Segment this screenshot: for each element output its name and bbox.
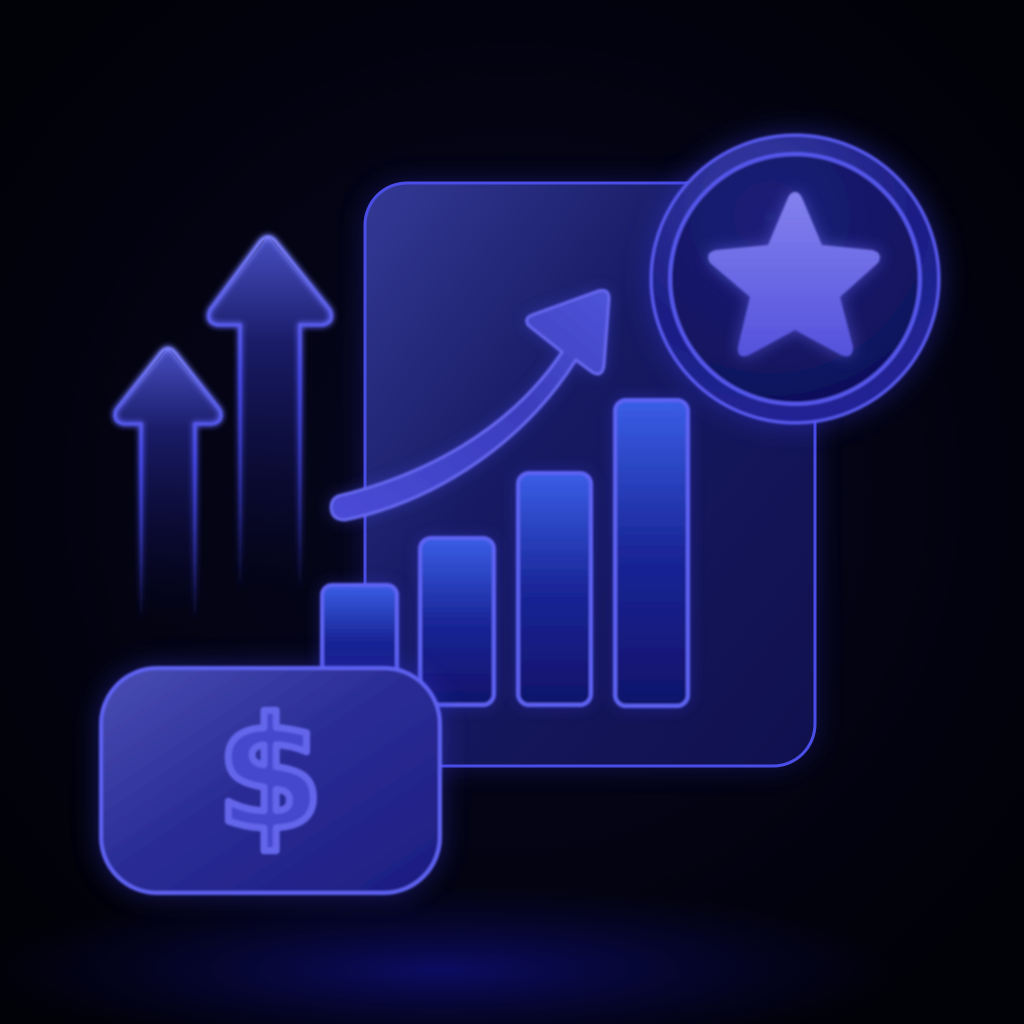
icon: star badge (649, 133, 941, 425)
bar 4 (614, 399, 689, 707)
floor glow (0, 885, 900, 1024)
panel: money card (100, 667, 441, 894)
bar 3 (517, 472, 592, 706)
panel: chart board (365, 183, 815, 766)
bar 2 (419, 537, 495, 706)
icon: tall up arrow (208, 236, 332, 590)
icon: dollar sign: $ (216, 684, 324, 865)
icon: rising curved arrow (331, 290, 609, 520)
bar 1 (321, 584, 398, 694)
icon: small up arrow (114, 348, 222, 620)
bar chart (321, 399, 689, 707)
star (708, 192, 880, 356)
